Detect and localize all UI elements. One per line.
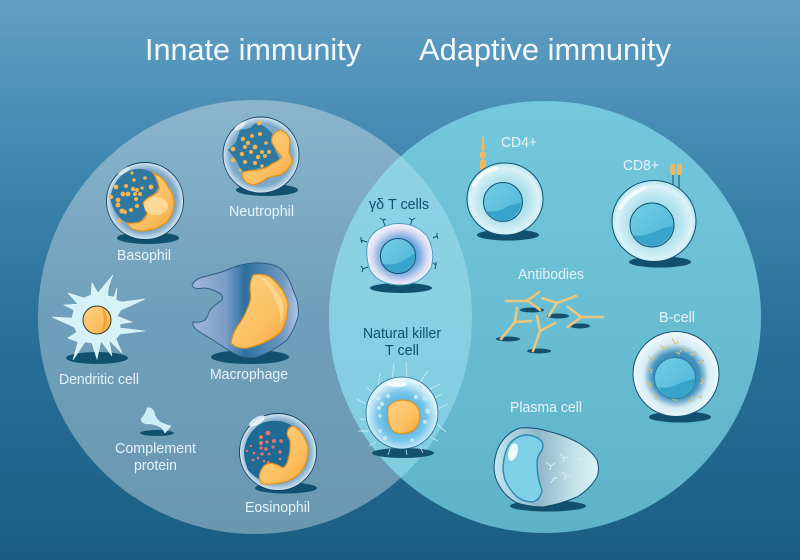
cell: gamma delta T cell [361, 218, 438, 293]
label: eosinophil: Eosinophil [245, 499, 310, 516]
label: B-cell: B-cell [659, 309, 695, 326]
label: CD4+: CD4+ [501, 134, 537, 151]
label: dendritic cell: Dendritic cell [59, 371, 139, 388]
cell: plasma cell [494, 428, 598, 512]
cell: CD8+ T cell [612, 164, 696, 268]
label: complement protein: Complement [115, 440, 197, 457]
cell: CD4+ T cell [467, 137, 543, 240]
cell: eosinophil [240, 413, 317, 494]
label: antibodies: Antibodies [518, 266, 584, 283]
label: natural killer T cell second line: T cell [385, 342, 419, 359]
cell: macrophage [192, 263, 298, 364]
title: innate immunity: Innate immunity [145, 32, 361, 67]
label: macrophage: Macrophage [210, 366, 288, 383]
label: complement protein second line: protein [134, 457, 177, 474]
cell: natural killer T cell [357, 362, 448, 458]
label: basophil: Basophil [117, 247, 171, 264]
label: natural killer T cell: Natural killer [363, 325, 441, 342]
antibodies group [496, 292, 603, 354]
cell: neutrophil [223, 117, 299, 196]
label: neutrophil: Neutrophil [229, 203, 294, 220]
label: plasma cell: Plasma cell [510, 399, 582, 416]
panel: overlap of both circles [329, 156, 472, 478]
cell: B-cell [633, 332, 719, 422]
panel: adaptive immunity circle [329, 101, 761, 533]
title: adaptive immunity: Adaptive immunity [419, 32, 671, 67]
icon: complement protein [140, 408, 174, 436]
panel: innate immunity circle [38, 100, 472, 534]
cell: basophil [106, 162, 184, 244]
label: CD8+: CD8+ [623, 157, 659, 174]
label: gamma delta T cells: γδ T cells [369, 196, 429, 213]
cell: dendritic cell [52, 275, 145, 364]
